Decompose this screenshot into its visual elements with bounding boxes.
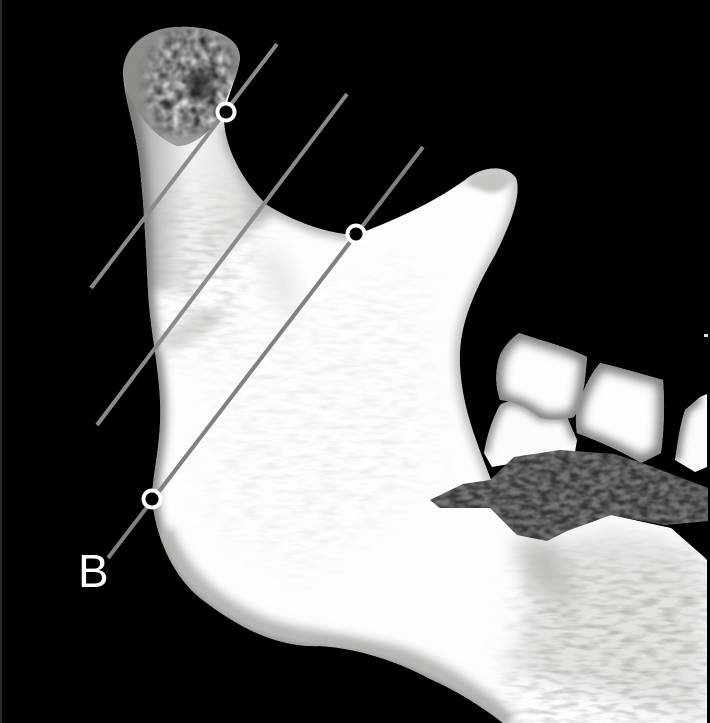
- teeth group: [480, 330, 710, 474]
- soft tissue artefact band: [430, 450, 708, 541]
- condyle lower fold: [159, 128, 208, 146]
- condyle surface texture: [148, 29, 236, 141]
- neck shading: [124, 90, 272, 290]
- tooth: lower rear molar: [484, 402, 577, 467]
- tooth: front molar: [675, 394, 707, 472]
- notch shading: [226, 125, 355, 235]
- coronoid tip: [466, 172, 512, 193]
- marker: gonion point: [144, 490, 160, 508]
- condyle dark pit: [187, 69, 213, 99]
- tooth: upper rear molar: [496, 333, 587, 420]
- left edge shading: [123, 72, 503, 723]
- lower right shaded body: [500, 530, 707, 723]
- reference line 2: [97, 94, 347, 425]
- condyle head: [123, 26, 240, 146]
- dark streaks beneath band: [515, 538, 575, 610]
- tooth: middle molar: [576, 363, 664, 463]
- reference line 1: [91, 44, 277, 288]
- jaw angle shading: [165, 530, 510, 723]
- band mottling: [430, 450, 708, 541]
- upper ramus ripple texture: [165, 180, 260, 360]
- marker: condyle point: [218, 104, 234, 120]
- image left edge line: [0, 0, 2, 723]
- main body faint ripple texture: [222, 296, 426, 555]
- reference line B: [108, 147, 423, 558]
- coronoid edge shading: [460, 168, 518, 490]
- condyle base: [123, 26, 240, 146]
- bone base shape: [123, 27, 707, 723]
- label B: B: [78, 545, 109, 597]
- lower right ripple texture: [500, 560, 710, 723]
- band base: [430, 450, 708, 541]
- ramus inner shadows: [158, 309, 228, 352]
- tick mark right edge: [704, 334, 708, 337]
- marker: sigmoid notch point: [348, 226, 364, 242]
